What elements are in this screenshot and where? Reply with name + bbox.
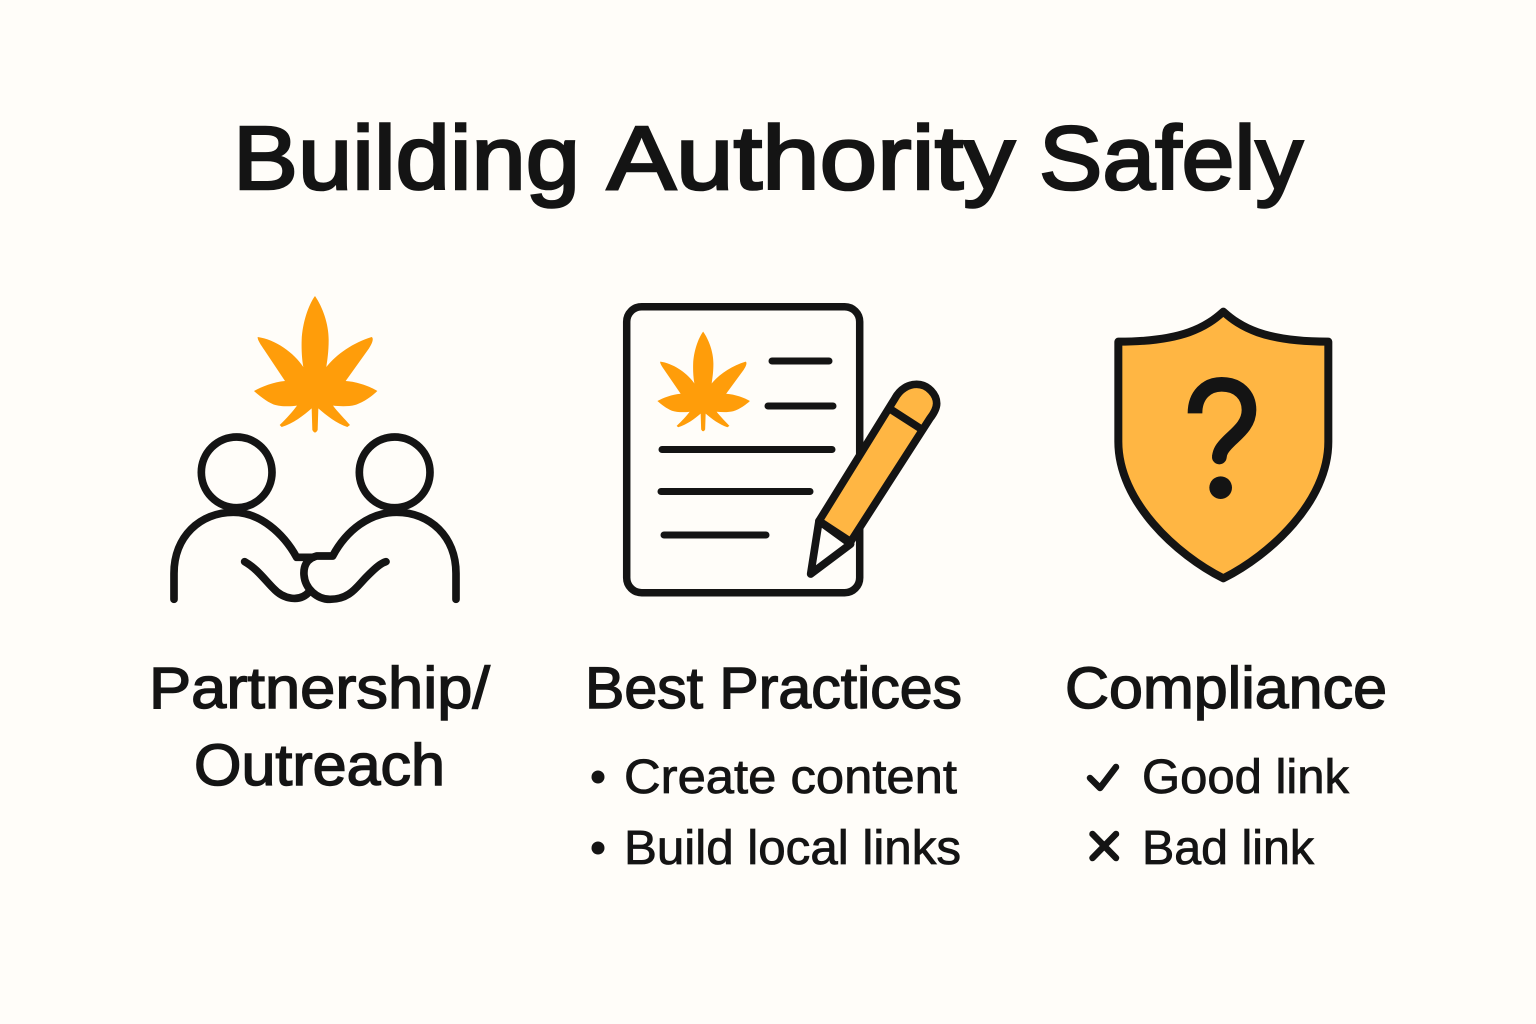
check item: good link: Good link (1142, 751, 1350, 804)
heading: partnership: Partnership/ (149, 656, 491, 721)
icon: cannabis leaf (254, 296, 377, 432)
icon: two people shaking hands (174, 437, 456, 599)
title: Safely (1039, 109, 1303, 209)
document leaf (657, 332, 750, 431)
cross item: bad link: Bad link (1142, 822, 1315, 875)
heading: outreach: Outreach (194, 733, 445, 798)
panel: compliance (1065, 312, 1387, 875)
bullet: build local links: Build local links (624, 822, 961, 875)
heading: compliance: Compliance (1065, 656, 1387, 721)
panel: best practices (585, 307, 962, 875)
panel: partnership/outreach (149, 296, 491, 798)
document text lines (661, 361, 833, 535)
pencil (811, 384, 937, 574)
icon: shield with question mark (1118, 312, 1328, 578)
title: Authority (607, 109, 1015, 209)
title (233, 109, 1303, 209)
title: Building (233, 109, 580, 209)
document outline (627, 307, 860, 593)
icon: document with leaf and pencil (627, 307, 937, 593)
heading: best practices: Best Practices (585, 656, 962, 721)
bullet: create content: Create content (624, 751, 957, 804)
